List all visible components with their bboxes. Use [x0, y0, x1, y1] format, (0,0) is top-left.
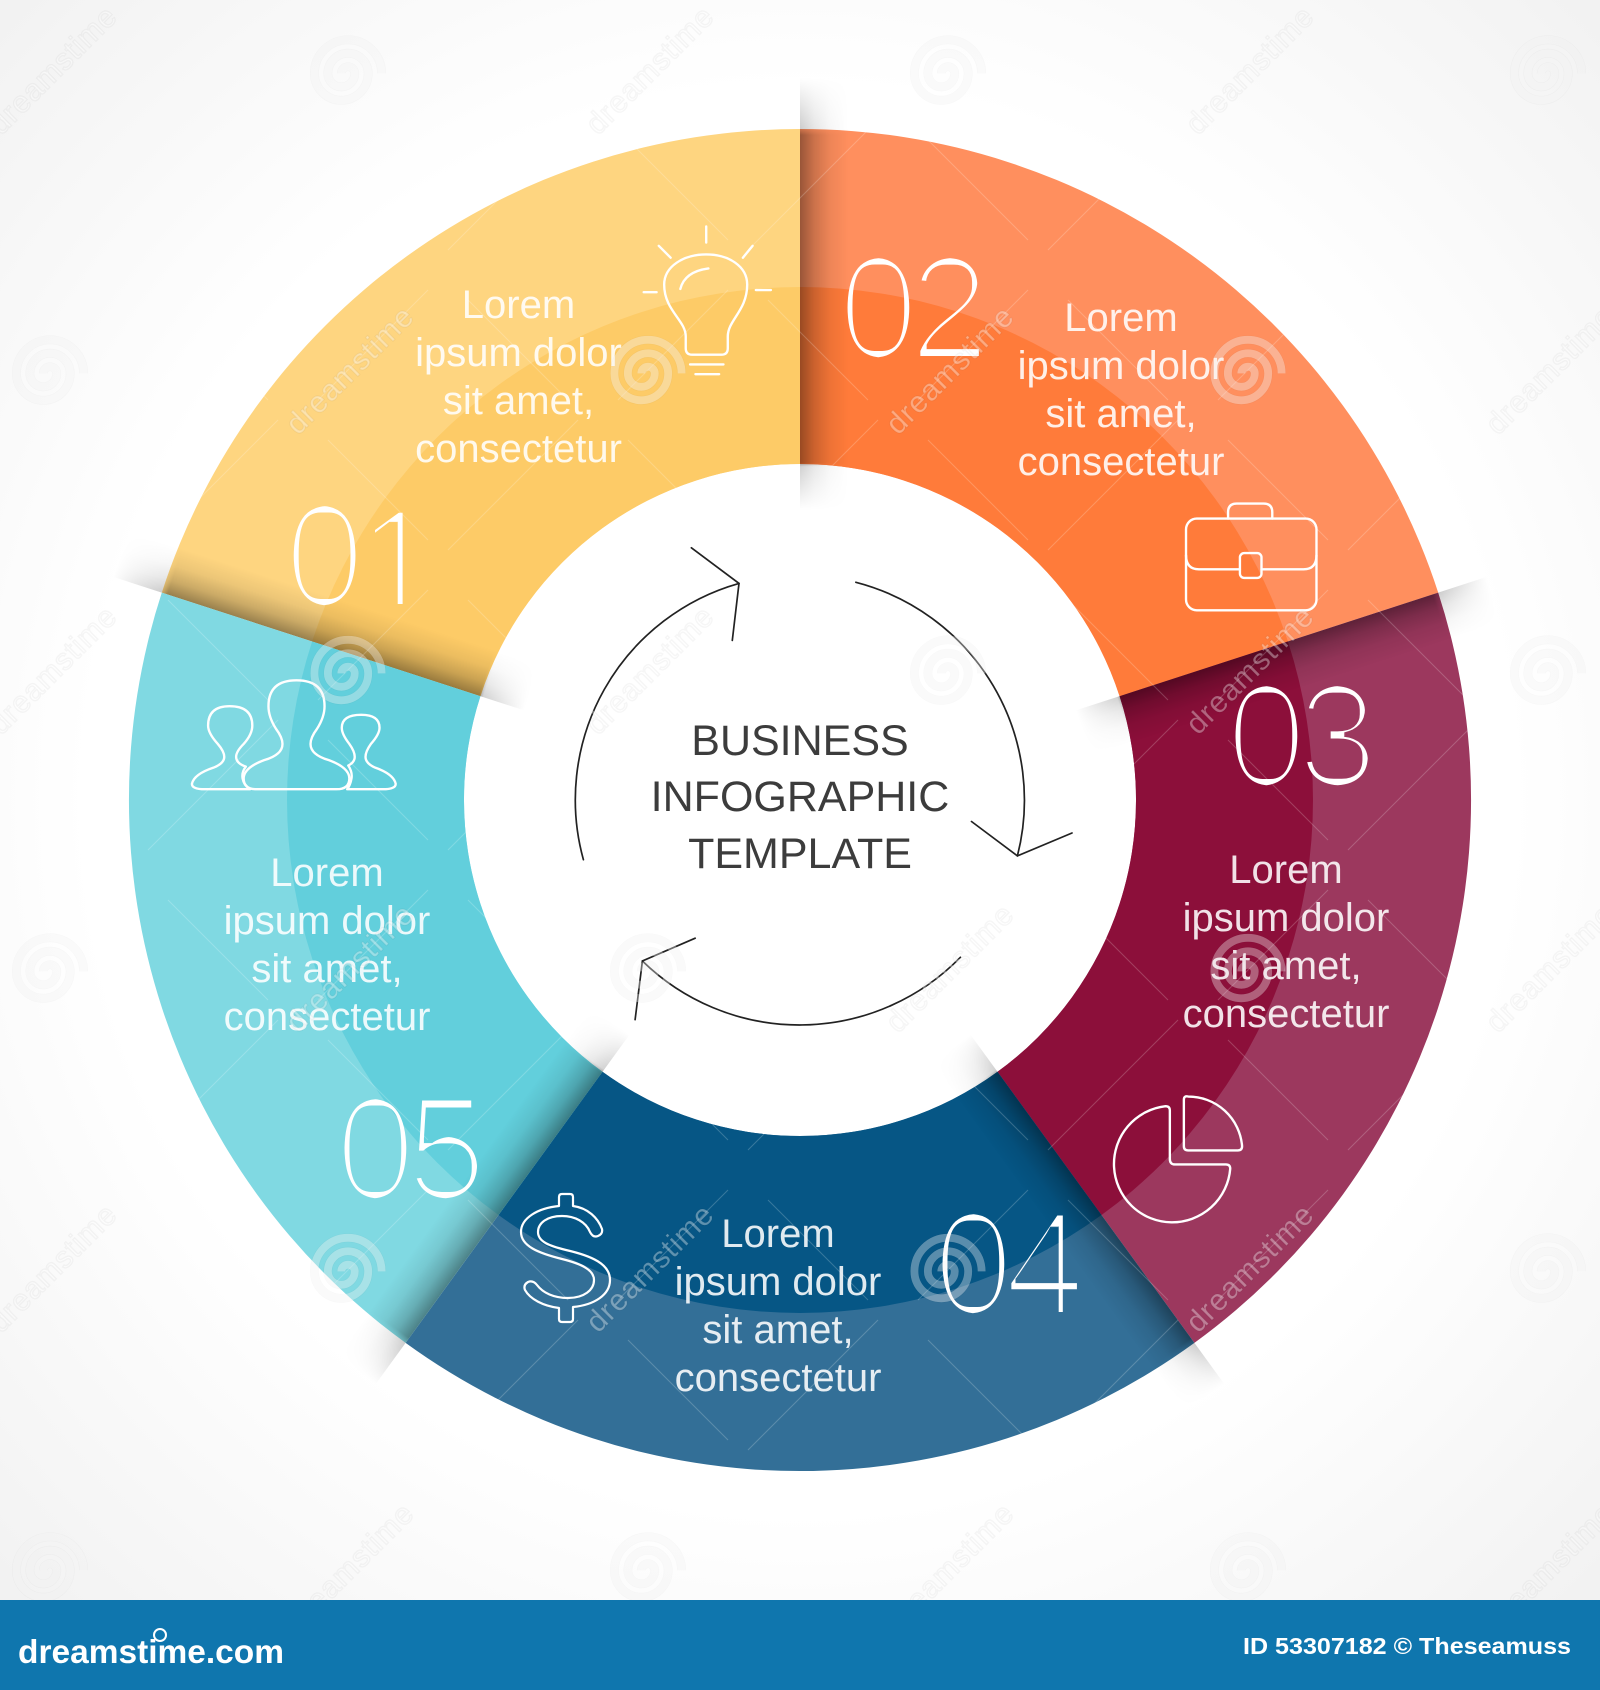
number 01 — [294, 506, 403, 606]
center title: TEMPLATE — [688, 830, 912, 878]
text block 02: sit amet, — [1045, 392, 1197, 436]
text block 01: Lorem — [462, 283, 575, 327]
center title — [651, 717, 949, 878]
watermarks: dreamstime — [580, 1198, 721, 1339]
number 04: 04 — [933, 1182, 1081, 1345]
text block 05: Lorem — [270, 851, 384, 895]
arrow: cycle top left — [575, 548, 739, 860]
text block 03: Lorem — [1229, 848, 1343, 892]
icon: three people — [192, 680, 396, 789]
arrow: cycle right — [856, 582, 1072, 856]
icon: light bulb — [644, 226, 771, 374]
text block 02: ipsum dolor — [1018, 344, 1224, 388]
number 01: 1 — [357, 477, 438, 650]
text block 01: consectetur — [415, 427, 622, 471]
number 01: 0 — [284, 474, 365, 637]
watermarks: dreamstime — [1180, 0, 1321, 141]
watermarks: dreamstime — [280, 300, 421, 441]
watermarks: dreamstime — [580, 600, 721, 741]
watermarks: dreamstime — [280, 898, 421, 1039]
watermarks: dreamstime — [880, 300, 1021, 441]
panel: segment 03 maroon — [998, 577, 1501, 1343]
panel: segment 04 blue — [406, 1035, 1224, 1471]
center title: BUSINESS — [691, 717, 909, 765]
text block 03: ipsum dolor — [1183, 896, 1389, 940]
watermarks: dreamstime — [880, 898, 1021, 1039]
text block 04 — [675, 1212, 881, 1400]
text block 04: ipsum dolor — [675, 1260, 881, 1304]
watermarks: dreamstime — [1180, 600, 1321, 741]
footer logo: dreamstime.com — [18, 1633, 284, 1670]
footer credit: ID 53307182 © Theseamuss — [1243, 1633, 1571, 1659]
text block 01 — [415, 283, 622, 471]
center circle — [464, 464, 1136, 1136]
text block 03: sit amet, — [1210, 944, 1362, 988]
panel: segment 02 orange — [800, 78, 1438, 696]
text block 03: consectetur — [1183, 992, 1389, 1036]
text block 05: consectetur — [224, 995, 430, 1039]
watermarks: dreamstime — [280, 1497, 421, 1638]
arrow: cycle bottom — [635, 938, 960, 1025]
watermarks: dreamstime — [880, 1497, 1021, 1638]
watermarks: dreamstime — [1180, 1198, 1321, 1339]
text block 04: Lorem — [721, 1212, 835, 1256]
number 03: 03 — [1226, 654, 1372, 817]
text block 03 — [1183, 848, 1389, 1036]
text block 01: sit amet, — [443, 379, 594, 423]
watermarks: dreamstime — [580, 0, 721, 141]
center title: INFOGRAPHIC — [651, 773, 949, 821]
number 05: 05 — [335, 1067, 482, 1230]
footer logo spiral — [154, 1629, 166, 1641]
text block 02 — [1018, 296, 1224, 484]
text block 01: ipsum dolor — [415, 331, 622, 375]
icon: pie chart — [1114, 1096, 1242, 1222]
text block 04: consectetur — [675, 1356, 881, 1400]
text block 02: consectetur — [1018, 440, 1224, 484]
footer banner — [0, 1600, 1600, 1690]
number 02: 02 — [838, 226, 983, 389]
text block 05: ipsum dolor — [224, 899, 430, 943]
text block 05 — [224, 851, 430, 1039]
text block 04: sit amet, — [702, 1308, 854, 1352]
text block 05: sit amet, — [251, 947, 403, 991]
panel: segment 05 teal — [129, 593, 630, 1384]
icon: briefcase — [1186, 504, 1316, 610]
text block 02: Lorem — [1064, 296, 1178, 340]
icon: dollar sign — [521, 1194, 610, 1322]
panel: segment 01 yellow — [113, 129, 800, 710]
